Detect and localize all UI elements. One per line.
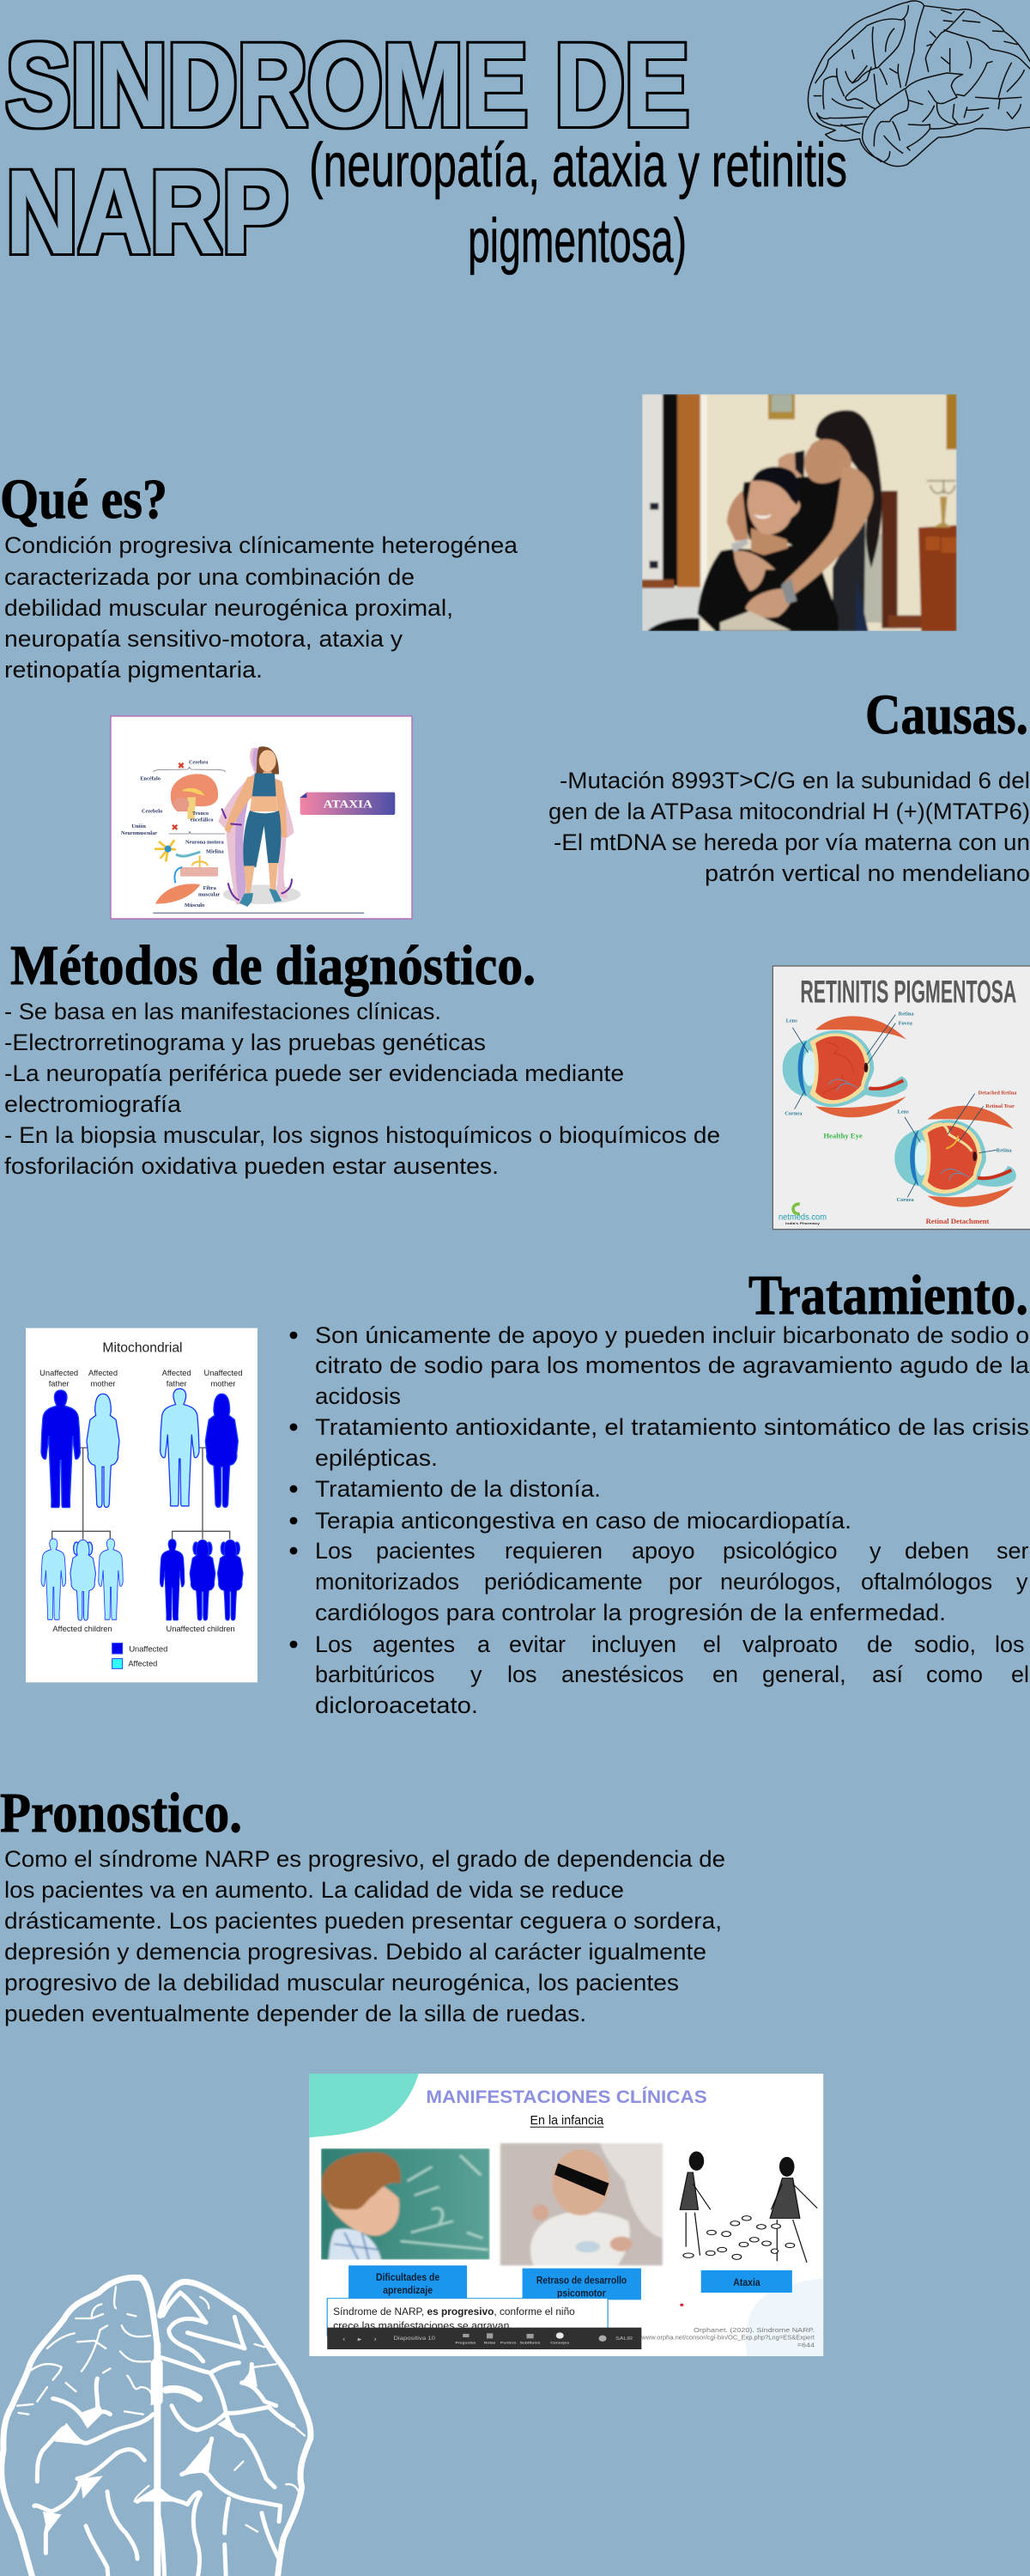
list: tratamiento: y: [1016, 1569, 1028, 1595]
list: tratamiento: apoyo: [632, 1538, 695, 1564]
panel: ataxia illustration: Neuromuscular: [121, 830, 157, 836]
subtitle: [309, 131, 847, 276]
list: tratamiento: incluyen: [591, 1631, 676, 1657]
panel: ataxia illustration: Unión: [131, 823, 146, 829]
text block: definición: [4, 532, 518, 683]
list: tratamiento: Son únicamente de apoyo y pueden incluir bicarbonato de sodio o: [315, 1322, 1029, 1348]
list: tratamiento: valproato: [742, 1631, 838, 1657]
panel: causas: [548, 683, 1030, 886]
presenter toolbar: Puntero: [500, 2341, 517, 2345]
panel: ataxia illustration: Encéfalo: [140, 775, 161, 781]
list: tratamiento: general,: [762, 1662, 846, 1687]
chart: mitochondrial inheritance pedigree: mother: [210, 1380, 235, 1388]
subtitle caption box: crece las manifestaciones se agravan: [333, 2320, 509, 2331]
text block: definición: neuropatía sensitivo-motora, ataxia y: [4, 626, 403, 652]
text block: definición: Condición progresiva clínicamente heterogénea: [4, 532, 518, 558]
chart: mitochondrial inheritance pedigree: mother: [90, 1380, 116, 1388]
list: tratamiento: monitorizados: [315, 1569, 459, 1595]
chart: mitochondrial inheritance pedigree: [26, 1328, 258, 1682]
text block: causas: gen de la ATPasa mitocondrial H (+)(MTATP6): [548, 799, 1030, 824]
label boxes: Dificultades de: [376, 2271, 439, 2283]
panel: retinitis pigmentosa diagram: Cornea: [785, 1110, 803, 1116]
panel: métodos de diagnóstico: [4, 934, 720, 1179]
chart: mitochondrial inheritance pedigree: father: [167, 1380, 187, 1388]
title: [6, 20, 689, 278]
text block: causas: -Mutación 8993T>C/G en la subunidad 6 del: [560, 768, 1030, 793]
list: tratamiento: así: [872, 1662, 904, 1687]
slide title: MANIFESTACIONES CLÍNICAS: [426, 2086, 707, 2107]
chart: mitochondrial inheritance pedigree: Affected: [88, 1369, 118, 1377]
text block: pronóstico: Como el síndrome NARP es progresivo, el grado de dependencia de: [4, 1846, 725, 1872]
chart: mitochondrial inheritance pedigree: Unaffected: [39, 1369, 78, 1377]
panel: retinitis pigmentosa diagram: Healthy Eye: [823, 1132, 863, 1140]
label boxes: aprendizaje: [383, 2284, 433, 2296]
list: tratamiento: psicológico: [723, 1538, 838, 1564]
citation: =644: [797, 2342, 815, 2348]
chart: mitochondrial inheritance pedigree: Unaffected children: [167, 1625, 235, 1633]
chart: mitochondrial inheritance pedigree: Affected children: [52, 1625, 112, 1633]
text block: pronóstico: drásticamente. Los pacientes pueden presentar ceguera o sordera,: [4, 1908, 722, 1934]
text block: definición: caracterizada por una combinación de: [4, 564, 415, 590]
icon: healthy eye: [783, 1015, 907, 1117]
panel: retinitis pigmentosa diagram: Lens: [898, 1109, 909, 1115]
list: tratamiento: dicloroacetato.: [315, 1692, 478, 1718]
people: children: [41, 1539, 243, 1620]
icon: outlined brain top right: [808, 1, 1030, 167]
list: tratamiento: los: [995, 1631, 1025, 1657]
people: parents: [41, 1388, 238, 1508]
text block: causas: -El mtDNA se hereda por vía materna con un: [554, 829, 1030, 855]
panel: ataxia illustration: muscular: [198, 891, 220, 897]
pointer dot: [680, 2304, 683, 2306]
text block: pronóstico: pueden eventualmente depender de la silla de ruedas.: [4, 2001, 586, 2026]
text block: métodos: - Se basa en las manifestaciones clínicas.: [4, 999, 441, 1024]
list: tratamiento: oftalmólogos: [861, 1569, 992, 1595]
list: tratamiento: neurólogos,: [720, 1569, 841, 1595]
panel: ataxia illustration: Cerebelo: [142, 809, 162, 815]
list: tratamiento: los: [507, 1662, 537, 1687]
list: tratamiento: anestésicos: [561, 1662, 684, 1687]
citation: [640, 2327, 815, 2348]
heading: pronóstico: Pronostico.: [0, 1782, 242, 1844]
panel: tratamiento: [290, 1264, 1030, 1718]
list: tratamiento: evitar: [509, 1631, 566, 1657]
icon: white brain bottom left: [2, 2277, 311, 2576]
panel: retinitis pigmentosa diagram: Cornea: [897, 1197, 915, 1203]
chart: mitochondrial inheritance pedigree: Affected: [128, 1660, 157, 1668]
chart: mitochondrial inheritance pedigree: Mitochondrial: [102, 1341, 183, 1356]
presenter toolbar: ›: [374, 2336, 377, 2342]
panel: pronóstico: [0, 1782, 725, 2026]
label boxes: Ataxia: [733, 2276, 760, 2288]
list: tratamiento: por: [669, 1569, 702, 1595]
list: tratamiento: y: [470, 1662, 482, 1687]
panel: ataxia illustration: Neurona motora: [185, 840, 225, 846]
list: tratamiento: Tratamiento de la distonía.: [315, 1476, 601, 1502]
panel: retinitis pigmentosa diagram: Retina: [899, 1012, 914, 1018]
panel: retinitis pigmentosa diagram: India's Pharmacy: [785, 1222, 821, 1225]
list: tratamiento: en: [712, 1662, 738, 1687]
list: tratamiento: Tratamiento antioxidante, el tratamiento sintomático de las crisis: [315, 1414, 1029, 1440]
list: tratamiento: requieren: [505, 1538, 603, 1564]
list: tratamiento: pacientes: [376, 1538, 476, 1564]
panel: retinitis pigmentosa diagram: Retina: [997, 1147, 1012, 1153]
text block: métodos: - En la biopsia muscular, los signos histoquímicos o bioquímicos de: [4, 1122, 720, 1148]
label boxes: psicomotor: [557, 2287, 606, 2299]
photo: baby: [500, 2143, 663, 2265]
heading: qué es: Qué es?: [0, 468, 167, 531]
list: tratamiento: deben: [905, 1538, 969, 1564]
panel: slide manifestaciones clínicas: [309, 2074, 823, 2356]
presenter toolbar: Notas: [484, 2341, 496, 2345]
panel: ataxia illustration: Tronco: [192, 811, 209, 817]
heading: métodos: Métodos de diagnóstico.: [10, 934, 536, 997]
list: tratamiento: a: [477, 1631, 491, 1657]
icon: retinal detachment eye: [894, 1094, 1016, 1207]
presenter toolbar: Preguntas: [455, 2341, 476, 2345]
citation: www.orpha.net/consor/cgi-bin/OC_Exp.php?Lng=ES&Expert: [640, 2334, 815, 2341]
chart: mitochondrial inheritance pedigree: Unaffected: [203, 1369, 242, 1377]
list: tratamiento: ser: [997, 1538, 1029, 1564]
presenter toolbar: ▸: [358, 2336, 361, 2342]
presenter toolbar: ‹: [342, 2336, 345, 2342]
list: tratamiento: citrato de sodio para los momentos de agravamiento agudo de la: [315, 1352, 1030, 1378]
text block: métodos: [4, 999, 720, 1179]
chart: mitochondrial inheritance pedigree: Affected: [162, 1369, 191, 1377]
panel: ataxia illustration: Músculo: [185, 902, 204, 908]
text block: causas: patrón vertical no mendeliano: [705, 860, 1030, 886]
text block: definición: debilidad muscular neurogénica proximal,: [4, 595, 453, 621]
panel: retinitis pigmentosa diagram: [772, 966, 1030, 1230]
presenter toolbar: Diapositiva 10: [393, 2336, 435, 2342]
list: tratamiento: el: [1011, 1662, 1029, 1687]
title: NARP: [6, 147, 288, 278]
text block: pronóstico: progresivo de la debilidad muscular neurogénica, los pacientes: [4, 1970, 679, 1996]
panel: retinitis pigmentosa diagram: Fovea: [899, 1020, 913, 1026]
photo: boy at chalkboard: [321, 2148, 490, 2260]
drawing: ataxia gait: [680, 2152, 817, 2263]
presenter toolbar: Consejos: [550, 2341, 570, 2345]
chart: mitochondrial inheritance pedigree: father: [49, 1380, 70, 1388]
list: tratamiento: barbitúricos: [315, 1662, 435, 1687]
list: tratamiento: cardiólogos para controlar la progresión de la enfermedad.: [315, 1600, 946, 1625]
chart: mitochondrial inheritance pedigree: Unaffected: [129, 1644, 167, 1653]
list: tratamiento: Los: [315, 1538, 353, 1564]
panel: ataxia illustration: Cerebro: [189, 760, 208, 766]
list: tratamiento: acidosis: [315, 1383, 401, 1409]
list: tratamiento: epilépticas.: [315, 1445, 438, 1471]
panel: ataxia illustration: Mielina: [206, 849, 225, 855]
panel: qué es: [0, 468, 518, 683]
panel: ataxia illustration: [111, 716, 412, 919]
panel: retinitis pigmentosa diagram: Detached Retina: [978, 1091, 1017, 1097]
panel: retinitis pigmentosa diagram: Lens: [786, 1018, 797, 1024]
text block: métodos: -La neuropatía periférica puede ser evidenciada mediante: [4, 1060, 624, 1086]
list: tratamiento: Los: [315, 1631, 353, 1657]
text block: métodos: -Electrorretinograma y las pruebas genéticas: [4, 1030, 486, 1055]
list: tratamiento: [290, 1322, 1030, 1718]
list: tratamiento: de: [867, 1631, 893, 1657]
panel: ataxia illustration: ATAXIA: [324, 799, 373, 811]
list: tratamiento: agentes: [373, 1631, 455, 1657]
label boxes: Retraso de desarrollo: [536, 2275, 627, 2286]
presenter toolbar: Subtítulos: [520, 2341, 541, 2345]
panel: retinitis pigmentosa diagram: netmeds.com: [779, 1213, 827, 1223]
citation: Orphanet. (2020). Síndrome NARP.: [694, 2327, 815, 2334]
subtitle caption box: Síndrome de NARP, es progresivo, conforme el niño: [333, 2306, 575, 2318]
list: tratamiento: el: [703, 1631, 721, 1657]
list: tratamiento: y: [869, 1538, 882, 1564]
text block: definición: retinopatía pigmentaria.: [4, 657, 263, 683]
subtitle: pigmentosa): [468, 207, 687, 276]
text block: pronóstico: [4, 1846, 725, 2026]
list: tratamiento: periódicamente: [484, 1569, 643, 1595]
panel: photo of man in wheelchair with carer: [642, 394, 957, 631]
panel: ataxia illustration: Fibra: [203, 885, 217, 891]
panel: retinitis pigmentosa diagram: Retinal Detachment: [926, 1217, 990, 1225]
text block: pronóstico: depresión y demencia progresivas. Debido al carácter igualmente: [4, 1939, 706, 1965]
text block: métodos: fosforilación oxidativa pueden estar ausentes.: [4, 1153, 499, 1179]
text block: métodos: electromiografía: [4, 1091, 182, 1117]
panel: retinitis pigmentosa diagram: Retinal Tear: [985, 1103, 1015, 1109]
label boxes: [348, 2265, 792, 2300]
presenter toolbar: [327, 2328, 641, 2349]
text block: pronóstico: los pacientes va en aumento. La calidad de vida se reduce: [4, 1877, 624, 1903]
list: tratamiento: sodio,: [914, 1631, 976, 1657]
legend: [112, 1643, 123, 1668]
text block: causas: [548, 768, 1030, 886]
title: SINDROME DE: [6, 20, 689, 151]
subtitle caption box: [327, 2299, 608, 2336]
panel: ataxia illustration: encefálico: [191, 817, 213, 823]
slide subtitle: En la infancia: [530, 2113, 604, 2128]
list: tratamiento: Terapia anticongestiva en caso de miocardiopatía.: [315, 1508, 851, 1534]
presenter toolbar: SALIR: [615, 2336, 633, 2342]
list: tratamiento: como: [926, 1662, 983, 1687]
